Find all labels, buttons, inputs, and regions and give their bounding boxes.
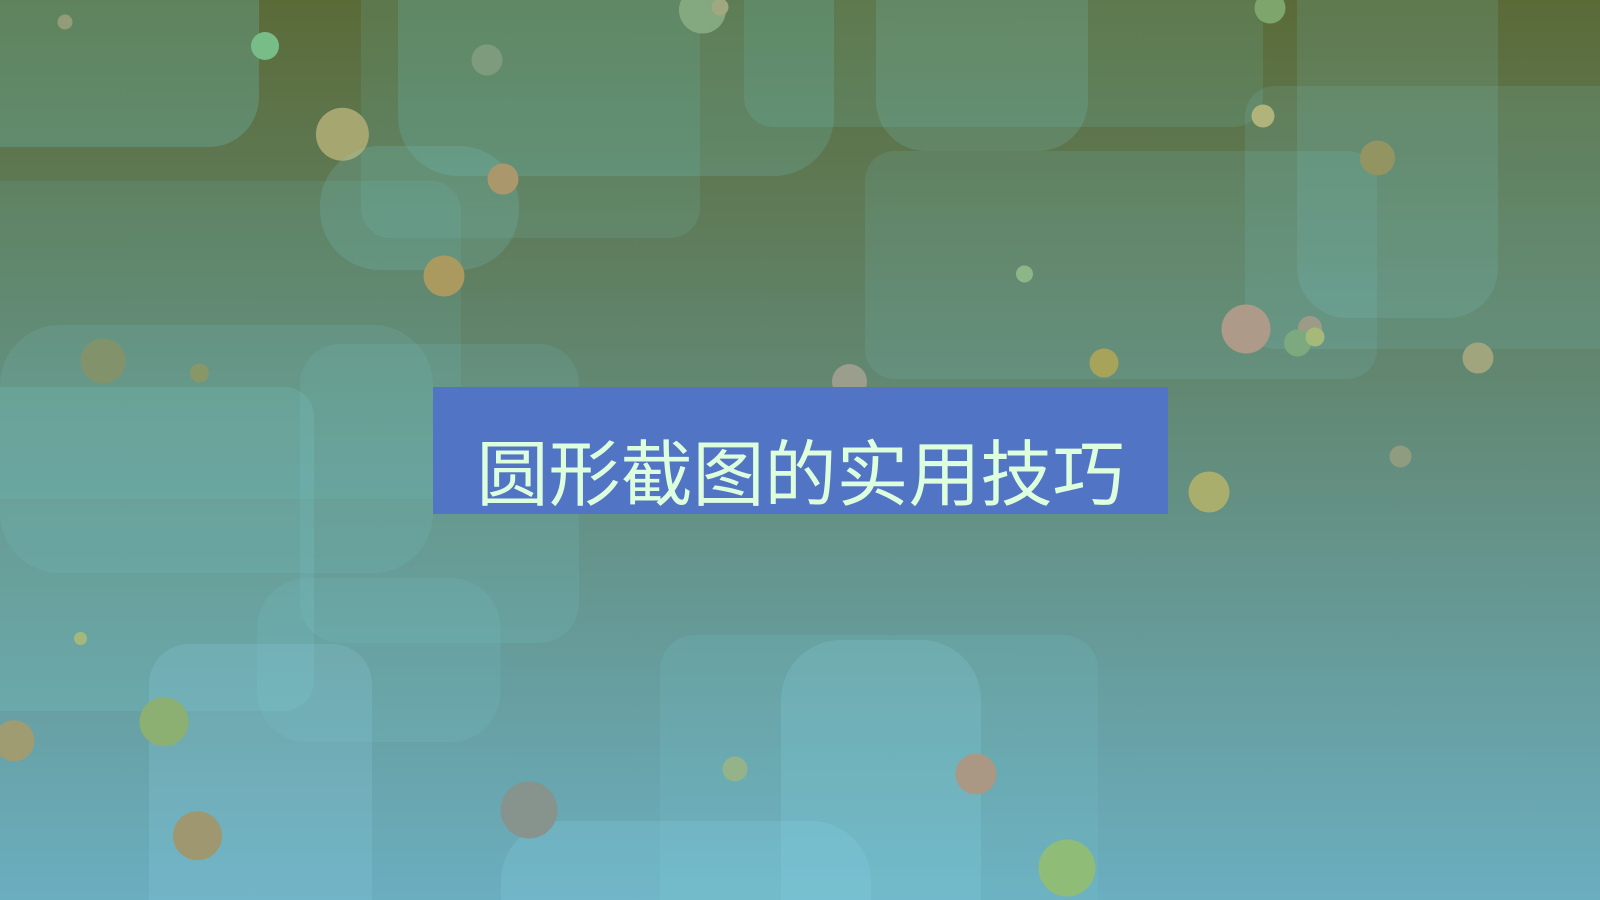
- bubble behind panel: [316, 108, 369, 161]
- title banner: [433, 387, 1168, 516]
- title: 圆形截图的实用技巧: [476, 436, 1125, 516]
